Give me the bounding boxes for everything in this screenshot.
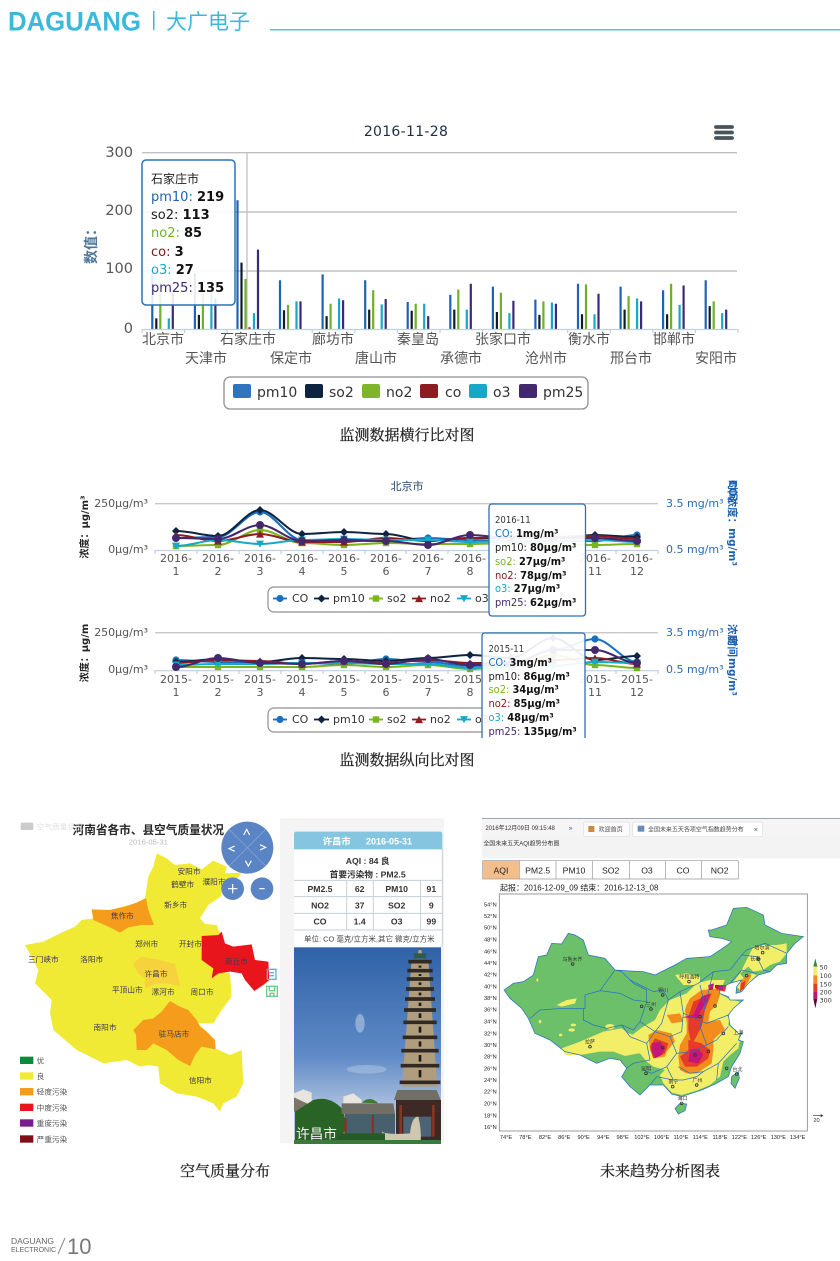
panel: xuchang detail card [280,818,444,1144]
x labels: 6 [382,565,390,578]
icon: data view [267,969,276,979]
right axis labels [666,626,724,676]
city markers: 长春 [750,956,760,963]
longitude labels: 102°E [634,1135,650,1141]
panel: 2016 line chart [78,479,739,616]
x labels: 1 [172,565,180,578]
latitude labels: 44°N [484,961,497,967]
x labels: 2016- [202,552,234,565]
city markers: 乌鲁木齐 [562,956,582,963]
province map [25,853,269,1112]
x labels: 2 [214,686,222,699]
x labels: 5 [340,565,348,578]
tooltip: 2015-11: o3: 48μg/m³ [489,712,554,724]
x labels: 2015- [244,673,276,686]
x axis labels: 承德市 [440,350,482,366]
left axis labels: 0μg/m³ [108,663,148,676]
tooltip: 2016-11: so2: 27μg/m³ [495,556,566,568]
city labels: 漯河市 [152,987,175,997]
x labels: 2 [214,565,222,578]
city labels: 开封市 [179,939,202,949]
city labels: 商丘市 [225,956,248,966]
left axis labels [94,497,148,556]
latitude labels: 18°N [484,1113,497,1119]
x labels [160,552,653,578]
magenta zone [652,983,724,1063]
city labels: 三门峡市 [28,954,59,964]
color scale: 150 [820,982,832,989]
x labels: 2016- [579,552,611,565]
city labels [28,866,248,1085]
right axis labels: 3.5 mg/m³ [666,497,724,510]
left axis labels: 0μg/m³ [108,543,148,556]
x labels: 2015- [202,673,234,686]
aqi summary [330,855,406,879]
map legend: 良 [37,1071,45,1081]
x axis labels: 沧州市 [525,350,567,366]
city markers: 广州 [692,1077,702,1084]
longitude labels: 78°E [519,1135,532,1141]
tooltip: 2016-11: pm10: 80μg/m³ [495,542,577,554]
x axis labels: 衡水市 [568,331,610,347]
x labels: 7 [424,686,432,699]
latitude labels: 32°N [484,1031,497,1037]
city labels: 安阳市 [178,866,201,876]
x labels: 2016- [328,552,360,565]
longitude labels: 82°E [539,1135,551,1141]
x axis [142,329,738,333]
x labels: 2015- [160,673,192,686]
latitude labels: 48°N [484,937,497,943]
city labels: 驻马店市 [159,1029,190,1039]
city markers: 哈尔滨 [755,945,769,952]
faded series label: 空气质量状况 [37,821,83,831]
orange zone [648,973,752,1073]
color scale: 300 [820,998,832,1005]
city markers: 南宁 [668,1078,678,1085]
pollutant table: SO2 [388,900,406,910]
city markers: 上海 [733,1029,743,1036]
bars [152,200,726,329]
map legend [20,1055,68,1144]
longitude labels: 126°E [751,1135,767,1141]
city labels: 许昌市 [145,969,168,979]
tooltip: shijiazhuang: o3: 27 [151,263,194,278]
longitude labels: 110°E [673,1135,689,1141]
pollutant tabs: CO [677,865,690,875]
city markers: 拉萨 [585,1038,595,1045]
pollutant tabs: AQI [494,865,508,875]
latitude labels: 46°N [484,949,497,955]
pollutant tabs [483,861,738,879]
city labels: 南阳市 [94,1022,117,1032]
page number: 10 [67,1234,91,1259]
y axis labels [105,145,133,337]
city markers [562,945,769,1105]
caption: vertical comparison: 监测数据纵向比对图 [339,751,475,769]
footer company name [11,1236,56,1254]
x axis labels: 邢台市 [610,350,652,366]
left axis labels [94,626,148,676]
icon: chart menu [716,127,732,138]
x axis labels: 唐山市 [355,350,397,366]
tooltip: 2016-11: o3: 27μg/m³ [495,583,561,595]
pollutant table: NO2 [311,900,329,910]
x labels: 6 [382,686,390,699]
land base [504,907,803,1097]
city markers: 呼和浩特 [679,973,699,980]
latitude labels: 26°N [484,1066,497,1072]
x axis labels: 秦皇岛 [397,331,439,347]
left axis labels: 250μg/m³ [94,626,148,639]
footer company name: DAGUANG [11,1236,54,1246]
longitude labels: 134°E [790,1135,806,1141]
aqi summary: AQI : 84 良 [346,855,390,866]
caption: horizontal comparison: 监测数据横行比对图 [339,426,475,444]
city labels: 濮阳市 [203,877,226,887]
x labels: 2015- [328,673,360,686]
city markers: 兰州 [646,1001,656,1008]
x axis labels: 廊坊市 [312,331,354,347]
tooltip: 2015-11: so2: 34μg/m³ [489,684,559,696]
x labels: 7 [424,565,432,578]
faded series label [21,821,83,831]
y axis labels: 200 [105,203,133,219]
left axis labels: 250μg/m³ [94,497,148,510]
panel: henan air quality map [20,818,444,1144]
pollutant tabs: O3 [641,865,653,875]
caption: air quality distribution: 空气质量分布 [180,1162,270,1180]
province borders [504,907,803,1114]
right axis title: CO浓度：mg/m³ [726,480,739,566]
x labels: 8 [466,565,474,578]
x labels: 5 [340,686,348,699]
zoom in button [221,877,244,900]
longitude labels: 106°E [654,1135,670,1141]
chart legend [224,377,588,409]
right axis title: mg/m³ [726,658,738,696]
y axis labels: 100 [105,261,133,277]
x labels: 12 [630,565,644,578]
caption: future trend: 未来趋势分析图表 [600,1162,720,1180]
pollutant table: CO [314,917,327,927]
city markers: 台北 [732,1066,742,1073]
x axis labels: 石家庄市 [220,331,276,347]
color scale: 200 [820,990,832,997]
right axis title: 浓度 [726,624,739,645]
chart legend: pm10 [333,713,365,726]
latitude labels: 24°N [484,1078,497,1084]
latitude labels: 22°N [484,1090,497,1096]
longitude labels: 130°E [771,1135,786,1141]
tooltip: 2016-11: pm25: 62μg/m³ [495,597,577,609]
right axis title: 时间 [726,636,739,657]
x labels: 2016- [412,552,444,565]
pollutant table: 91 [427,884,436,894]
map title: 河南省各市、县空气质量状况 [73,823,224,837]
color scale: 100 [820,973,832,980]
latitude labels: 30°N [484,1043,497,1049]
photo caption: 许昌市 [296,1126,337,1142]
x labels: 3 [256,565,264,578]
pollutant table: PM2.5 [307,884,333,894]
chart legend: pm10 [333,592,365,605]
window toolbar: 全国未来五天各项空气指数趋势分布 [648,825,744,833]
chart legend: CO [292,592,309,605]
x labels: 2016- [370,552,402,565]
city markers: 海口 [678,1095,688,1102]
y axis labels: 300 [105,145,133,161]
chart legend [268,587,546,612]
x axis labels: 北京市 [142,331,184,347]
map legend: 优 [37,1055,45,1065]
footer [11,1234,91,1259]
color scale: 50 [820,965,828,972]
x axis labels: 天津市 [185,350,227,366]
x axis labels: 张家口市 [475,331,531,347]
header [8,6,840,36]
tooltip: 2016-11: CO: 1mg/m³ [495,528,559,540]
city labels: 焦作市 [111,911,134,921]
x labels: 2016- [621,552,653,565]
map date: 2016-05-31 [129,838,168,847]
city labels: 郑州市 [135,938,158,948]
longitude labels: 98°E [617,1135,629,1141]
tooltip: shijiazhuang: pm10: 219 [151,190,224,205]
latitude labels: 28°N [484,1055,497,1061]
longitude labels: 122°E [732,1135,747,1141]
tooltip: 2016-11: no2: 78μg/m³ [495,570,567,582]
chart legend [268,708,546,732]
tooltip: 2015-11: pm25: 135μg/m³ [489,726,577,738]
window toolbar: 欢迎首页 [599,825,623,833]
yellow zone [557,943,787,1095]
forecast period: 起报：2016-12-09_09 结束：2016-12-13_08 [500,882,659,892]
color scale [813,958,832,1008]
pollutant table: 62 [355,884,365,894]
x labels: 11 [588,686,602,699]
x labels: 2016- [454,552,486,565]
pollutant table: O3 [391,917,403,927]
chart legend: so2 [329,385,354,401]
x labels: 2016- [286,552,318,565]
tooltip: shijiazhuang [142,160,235,305]
unit note: 单位: CO 毫克/立方米,其它 微克/立方米 [304,933,435,943]
x labels: 12 [630,686,644,699]
x labels: 11 [588,565,602,578]
tooltip: 2016-11: 2016-11 [495,516,531,526]
x labels: 3 [256,686,264,699]
latitude labels: 34°N [484,1020,497,1026]
chart legend: no2 [430,592,451,605]
map legend: 中度污染 [37,1102,68,1112]
latitude labels: 36°N [484,1008,497,1014]
right axis labels [666,497,724,556]
footer slash [58,1238,65,1254]
icon: save [267,986,277,996]
latitude labels: 54°N [484,902,497,908]
x labels: 2015- [412,673,444,686]
right axis title [726,624,739,696]
panel: horizontal comparison bar chart [83,124,738,409]
longitude labels: 114°E [693,1135,708,1141]
left axis title: 浓度：μg/m³ [78,496,91,558]
tooltip: shijiazhuang: no2: 85 [151,226,202,241]
x labels: 1 [172,686,180,699]
tooltip: 2015-11: pm10: 86μg/m³ [489,671,570,683]
chart legend: o3 [475,713,489,726]
x axis labels [142,331,737,366]
card heading [294,832,442,849]
chart legend: pm10 [257,385,297,401]
card heading: 许昌市 [323,835,351,846]
wind scale arrow [813,1114,823,1124]
pollutant table: 37 [355,900,365,910]
latitude labels: 16°N [484,1125,497,1131]
tooltip: 2015-11: CO: 3mg/m³ [489,657,552,669]
hainan and taiwan [675,1072,739,1114]
longitude labels: 74°E [500,1135,512,1141]
left axis title: 浓度：μg/m [78,624,91,682]
x labels: 4 [298,565,306,578]
header rule [270,29,840,30]
pollutant table: 1.4 [354,917,366,927]
x labels: 4 [298,686,306,699]
window toolbar: 全国未来五天AQI趋势分布图 [483,839,559,847]
card heading: 2016-05-31 [366,836,412,846]
latitude labels: 38°N [484,996,497,1002]
pollutant tabs: PM2.5 [525,865,550,875]
x labels: 2015- [370,673,402,686]
chart legend: o3 [475,592,489,605]
pollutant table: PM10 [385,884,408,894]
scattered yellow patches [536,978,615,1036]
city labels: 新乡市 [164,900,187,910]
map legend: 重度污染 [37,1118,68,1128]
latitude labels: 40°N [484,984,497,990]
y axis title: 数值： [83,222,99,264]
red zone [650,981,746,1067]
aqi summary: 首要污染物 : PM2.5 [330,868,406,879]
panel: china forecast map [482,818,840,1141]
city labels: 鹤壁市 [171,879,194,889]
latitude labels [484,902,497,1131]
chart legend: CO [292,713,309,726]
window toolbar: × [753,827,758,834]
chinese brand name: 大广电子 [166,11,250,34]
tooltip: shijiazhuang: 石家庄市 [151,171,199,186]
brand name: DAGUANG [8,6,141,36]
pollutant tabs: SO2 [602,865,620,875]
chart legend: so2 [387,592,406,605]
chart legend: pm25 [543,385,583,401]
x axis labels: 邯郸市 [653,331,695,347]
window toolbar [482,818,840,858]
x labels [160,673,653,699]
tooltip: 2015-11 [482,633,585,738]
longitude labels: 94°E [597,1135,610,1141]
x labels: 2015- [579,673,611,686]
chart legend: co [445,385,461,401]
panel: 2015 line chart [78,624,739,738]
x labels: 2015- [286,673,318,686]
map legend: 严重污染 [37,1134,68,1144]
pollutant table [294,849,442,947]
china aqi map [504,907,803,1114]
longitude labels: 90°E [578,1135,590,1141]
pollutant tabs: NO2 [711,865,729,875]
x labels: 2016- [160,552,192,565]
city labels: 周口市 [191,987,214,997]
right axis labels: 0.5 mg/m³ [666,543,724,556]
longitude labels: 118°E [712,1135,728,1141]
city labels: 信阳市 [189,1075,212,1085]
wind scale arrow: 20 [813,1118,820,1124]
right axis labels: 0.5 mg/m³ [666,663,724,676]
longitude labels [500,1135,806,1141]
chart city title: 北京市 [390,479,424,493]
tooltip: shijiazhuang: so2: 113 [151,208,210,223]
city labels: 平顶山市 [112,984,143,994]
chart legend: no2 [386,385,412,401]
zoom out button [251,877,273,900]
series lines [176,510,637,546]
right axis title: 时间 [726,480,739,501]
y axis labels: 0 [124,321,133,337]
window toolbar: 2016年12月09日 09:15:48 [485,824,556,832]
x labels: 2015- [454,673,486,686]
x labels: 2016- [244,552,276,565]
chart legend: o3 [493,385,510,401]
map frame [499,894,807,1131]
x labels: 2015- [621,673,653,686]
tooltip: 2016-11 [489,504,586,616]
longitude labels: 86°E [558,1135,571,1141]
tooltip: shijiazhuang: pm25: 135 [151,281,224,296]
pollutant tabs: PM10 [563,865,585,875]
chart title: 2016-11-28 [364,124,448,140]
latitude labels: 52°N [484,914,497,920]
window toolbar: » [569,825,573,833]
brand divider [153,11,154,30]
map pan control [221,822,273,874]
latitude labels: 42°N [484,973,497,979]
right axis labels: 3.5 mg/m³ [666,626,724,639]
tooltip: shijiazhuang: co: 3 [151,245,184,260]
pollutant table: 99 [427,917,436,927]
latitude labels: 20°N [484,1102,497,1108]
x axis labels: 安阳市 [695,350,737,366]
chart legend: no2 [430,713,451,726]
city markers: 昆明 [641,1066,651,1072]
x axis labels: 保定市 [270,350,312,366]
city markers: 银川 [658,987,668,994]
x labels: 8 [466,686,474,699]
footer company name: ELECTRONIC [11,1247,56,1254]
photo: xuchang pagoda [294,947,441,1144]
series lines [176,638,637,669]
chart legend: so2 [387,713,406,726]
tooltip: 2015-11: no2: 85μg/m³ [489,698,560,710]
tooltip: 2015-11: 2015-11 [489,645,524,655]
pollutant table: 9 [429,900,434,910]
latitude labels: 50°N [484,926,497,932]
city labels: 洛阳市 [80,954,103,964]
map legend: 轻度污染 [37,1087,68,1097]
